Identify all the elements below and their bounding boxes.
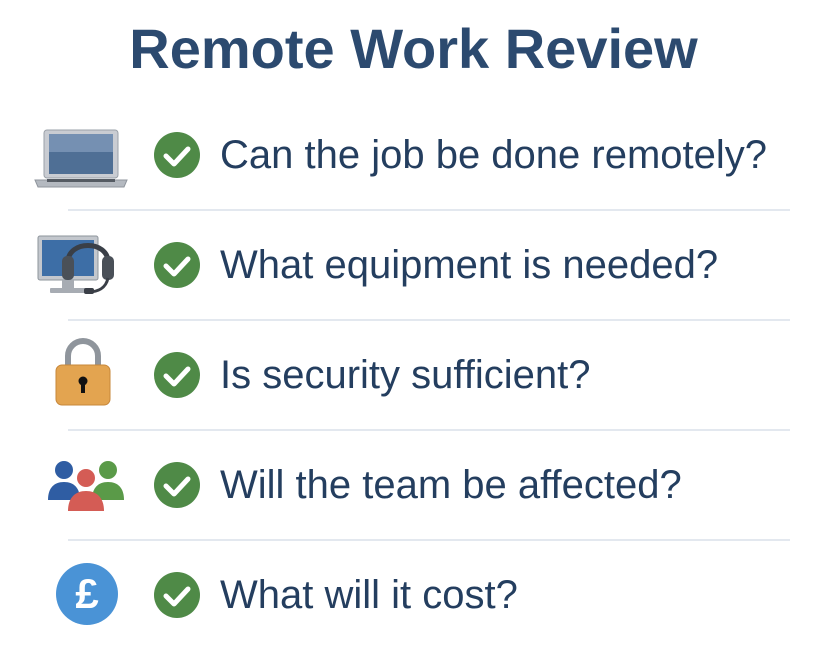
row: cost [56, 563, 518, 625]
check icon [154, 132, 200, 178]
icon: pound coin: £ [75, 570, 99, 617]
question text: Is security sufficient? [220, 353, 591, 397]
row: team [48, 461, 682, 511]
row: job remotely [34, 130, 767, 188]
icon: laptop [34, 130, 128, 188]
check icon [154, 352, 200, 398]
row: equipment [38, 236, 718, 294]
icon: people [48, 461, 124, 511]
check icon [154, 462, 200, 508]
icon: monitor with headset [38, 236, 114, 294]
question text: Will the team be affected? [220, 463, 682, 507]
icon: pound coin [56, 563, 118, 625]
title: Remote Work Review [129, 17, 698, 80]
question text: Can the job be done remotely? [220, 133, 767, 177]
check icon [154, 572, 200, 618]
row: security [56, 338, 591, 406]
question text: What equipment is needed? [220, 243, 718, 287]
check icon [154, 242, 200, 288]
question text: What will it cost? [220, 573, 518, 617]
icon: padlock [56, 338, 110, 406]
